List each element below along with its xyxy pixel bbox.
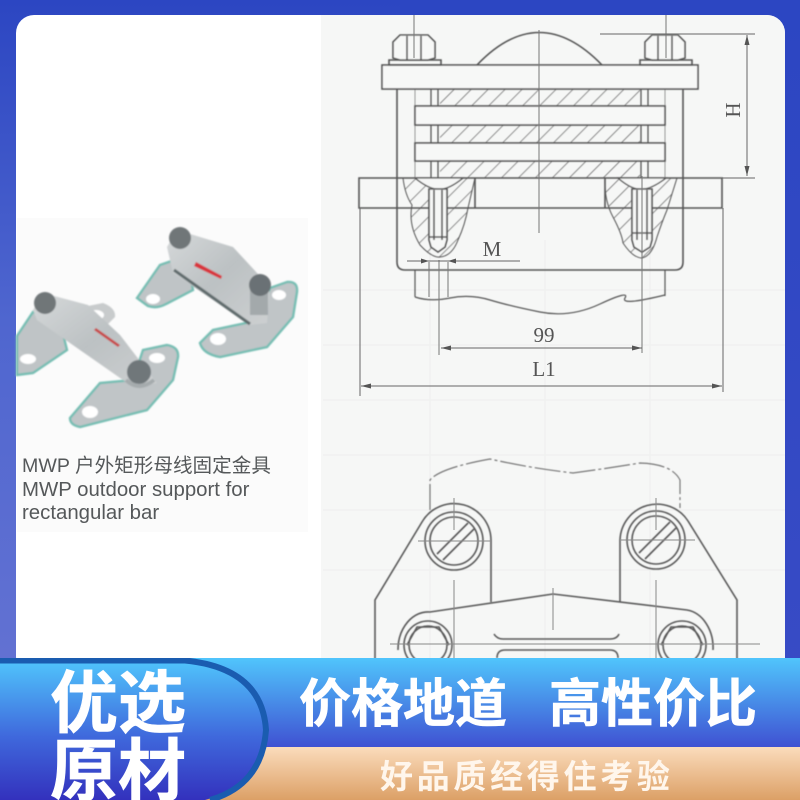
rods	[431, 89, 648, 178]
slogan: 优选原材: 优选	[50, 648, 186, 747]
clamp plate	[398, 594, 713, 650]
product caption: MWP 户外矩形母线固定金具	[22, 455, 271, 477]
dimension: H: H	[721, 102, 745, 118]
bars	[415, 106, 665, 125]
product caption: MWP outdoor support for	[22, 479, 250, 501]
right screw	[627, 511, 685, 569]
centre lines	[414, 15, 666, 355]
banner: left badge	[0, 660, 266, 800]
slogan: 价格地道: 价格地道	[299, 662, 507, 737]
dimension: 99: 99	[534, 323, 554, 347]
dimension: M: M	[483, 237, 502, 261]
dimension: L1: L1	[532, 357, 556, 381]
banner: bottom band	[0, 747, 800, 800]
dome	[477, 32, 602, 65]
left screw	[425, 512, 483, 570]
slogan: 好品质经得住考验: 好品质经得住考验	[380, 750, 674, 798]
banner: top band	[0, 658, 800, 748]
left tapped hole	[403, 178, 475, 257]
faint ghost table lines	[323, 240, 785, 660]
diagram: plan view	[375, 459, 737, 669]
dimension: L1	[360, 208, 723, 396]
panel: drawing sheet	[321, 15, 785, 675]
dimension: M	[407, 237, 520, 264]
slogan: 优选原材	[50, 648, 186, 800]
left lug	[375, 504, 491, 660]
dash-dot outline	[430, 459, 680, 510]
product: lower left bracket	[17, 292, 178, 427]
body outline	[397, 89, 683, 270]
right tapped hole	[605, 178, 677, 258]
right hex nut	[658, 621, 706, 669]
centre slots	[494, 634, 619, 658]
product caption	[22, 455, 271, 524]
diagram: front section view	[359, 32, 722, 314]
product caption: rectangular bar	[22, 502, 159, 524]
plan view centre lines	[390, 498, 760, 658]
panel: product photo	[17, 218, 308, 532]
left bolt head	[389, 35, 441, 65]
photo backdrop	[17, 218, 308, 532]
dimension: H	[600, 34, 755, 178]
top plate	[382, 65, 698, 89]
bottom plate	[359, 178, 722, 208]
product: upper right bracket	[137, 227, 297, 357]
dimension: 99	[441, 323, 642, 350]
right bolt head	[640, 35, 692, 65]
right lug	[620, 504, 737, 660]
slogan: 高性价比: 高性价比	[549, 662, 757, 737]
left hex nut	[404, 621, 452, 669]
white card	[16, 15, 785, 675]
banner	[0, 648, 800, 800]
hatched blocks	[440, 89, 640, 178]
